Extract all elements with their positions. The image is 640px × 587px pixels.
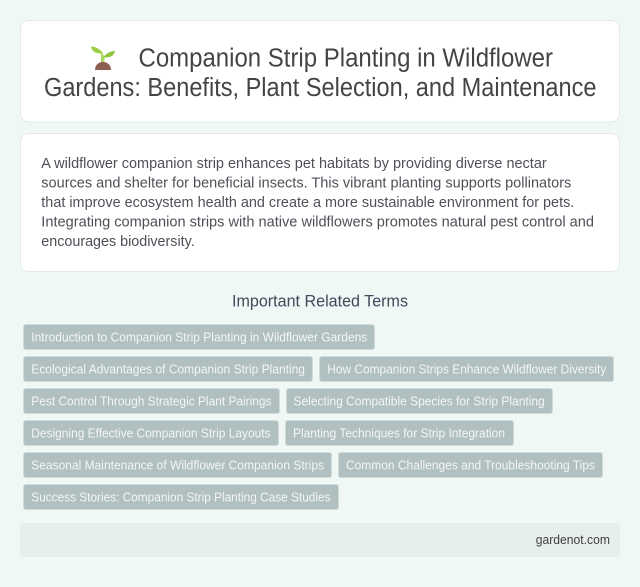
tag: seasonal maintenance <box>24 452 332 478</box>
tag: success stories: Success Stories: Companion Strip Planting Case Studies <box>31 490 331 504</box>
tag: designing layouts: Designing Effective Companion Strip Layouts <box>31 426 270 440</box>
icon: seedling <box>91 46 115 70</box>
title line 1: Companion Strip Planting in Wildflower <box>138 45 553 73</box>
tag: success stories <box>24 484 338 510</box>
tag: designing layouts <box>24 420 278 446</box>
panel: title card <box>20 20 620 122</box>
paragraph line 2: sources and shelter for beneficial insects. This vibrant planting supports pollinators <box>41 174 571 192</box>
footer source text: gardenot.com <box>536 532 610 547</box>
title line 2: Gardens: Benefits, Plant Selection, and Maintenance <box>44 74 596 102</box>
tag: selecting species <box>286 388 552 414</box>
tag: seasonal maintenance: Seasonal Maintenance of Wildflower Companion Strips <box>31 458 324 472</box>
tag: pest control <box>24 388 280 414</box>
paragraph line 5: encourages biodiversity. <box>41 233 195 250</box>
tag: introduction <box>24 324 374 350</box>
tag: selecting species: Selecting Compatible Species for Strip Planting <box>294 394 545 408</box>
footer <box>20 523 620 557</box>
tag: planting techniques <box>286 420 514 446</box>
tag: planting techniques: Planting Techniques for Strip Integration <box>293 426 505 440</box>
tag: common challenges: Common Challenges and Troubleshooting Tips <box>346 458 595 472</box>
tag: pest control: Pest Control Through Strategic Plant Pairings <box>31 394 271 408</box>
paragraph line 4: Integrating companion strips with native wildflowers promotes natural pest control and <box>41 214 594 231</box>
tag: wildflower diversity: How Companion Strips Enhance Wildflower Diversity <box>327 362 607 376</box>
tag: ecological advantages <box>24 356 312 382</box>
tag: common challenges <box>338 452 602 478</box>
tag: wildflower diversity <box>320 356 614 382</box>
tag group: related terms <box>24 324 614 510</box>
paragraph line 3: that improve ecosystem health and create a more sustainable environment for pets. <box>41 194 574 211</box>
panel: description <box>20 134 620 272</box>
tag: ecological advantages: Ecological Advantages of Companion Strip Planting <box>31 362 305 376</box>
heading: related terms: Important Related Terms <box>232 292 408 310</box>
tag: introduction: Introduction to Companion Strip Planting in Wildflower Gardens <box>31 330 367 344</box>
paragraph line 1: A wildflower companion strip enhances pet habitats by providing diverse nectar <box>41 155 547 172</box>
